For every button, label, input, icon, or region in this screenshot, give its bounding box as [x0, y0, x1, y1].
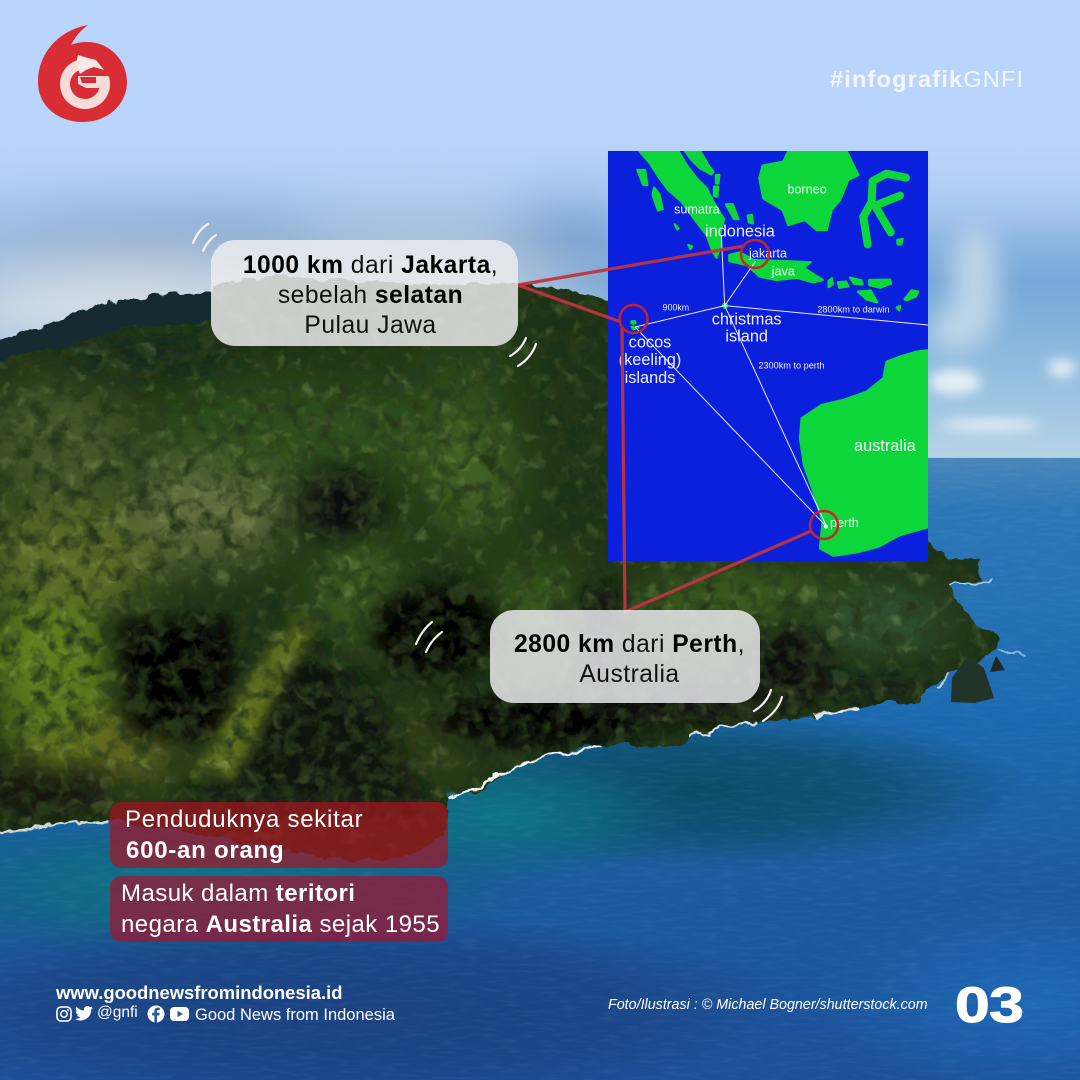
fact: territory: Masuk dalam teritori — [121, 880, 355, 907]
lit peak flank — [190, 612, 315, 780]
map labels: java — [771, 265, 796, 279]
icon: facebook — [148, 1006, 164, 1023]
back ridge — [0, 290, 230, 400]
map labels: cocos — [629, 333, 671, 351]
map labels: borneo — [787, 183, 827, 197]
callout: distance from Perth: 2800 km dari Perth, — [514, 631, 745, 658]
callout: distance from Perth: Australia — [579, 661, 680, 688]
map labels: perth — [830, 516, 859, 530]
callout: distance from Perth — [490, 610, 760, 703]
ocean — [0, 458, 1080, 1080]
map labels: indonesia — [705, 222, 776, 240]
map labels: (keeling) — [619, 351, 681, 369]
icon: instagram — [56, 1006, 72, 1022]
connector lines and map — [192, 151, 928, 722]
page number: 03 — [955, 977, 1023, 1033]
logo: GNFI red swirl with eagle G — [38, 25, 127, 122]
map land masses — [631, 151, 930, 556]
island — [0, 274, 1000, 863]
map labels: islands — [625, 369, 675, 387]
coast surf — [0, 582, 1024, 835]
callout accent arcs — [193, 224, 782, 721]
map labels: australia — [854, 437, 917, 455]
fact: territory: negara Australia sejak 1955 — [121, 911, 440, 938]
map labels: island — [725, 328, 768, 346]
handle: @gnfi — [97, 1004, 138, 1021]
channel name: Good News from Indonesia — [195, 1006, 395, 1024]
callout: distance from Jakarta — [211, 240, 518, 346]
icon: twitter — [75, 1006, 93, 1021]
map labels: 2300km to perth — [758, 360, 825, 370]
map labels: jakarta — [748, 247, 788, 261]
sky — [0, 0, 1080, 470]
map labels: 2800km to darwin — [817, 305, 890, 315]
red connector lines — [518, 246, 811, 612]
map labels — [619, 183, 917, 530]
callout: distance from Jakarta: Pulau Jawa — [304, 312, 437, 339]
website: www.goodnewsfromindonesia.id — [56, 982, 342, 1003]
callout: distance from Jakarta: 1000 km dari Jakarta, — [243, 252, 498, 279]
light blue header haze — [0, 0, 1080, 240]
map labels: sumatra — [674, 202, 721, 216]
fact: territory — [110, 876, 448, 942]
social row — [56, 1004, 395, 1024]
callout: distance from Jakarta: sebelah selatan — [278, 282, 463, 309]
map panel — [608, 151, 930, 561]
fact: population: 600-an orang — [126, 837, 284, 864]
fact: population — [110, 802, 448, 868]
map labels: christmas — [712, 310, 782, 328]
map labels: 900km — [663, 303, 689, 313]
map distance lines — [635, 235, 928, 527]
fact: population: Penduduknya sekitar — [125, 806, 363, 833]
hashtag: #infografikGNFI — [830, 66, 1024, 92]
icon: youtube — [170, 1007, 189, 1021]
photo credit: Foto/Ilustrasi : © Michael Bogner/shutterstock.com — [608, 997, 928, 1013]
sea rocks — [951, 656, 994, 703]
red location circles — [620, 240, 838, 539]
